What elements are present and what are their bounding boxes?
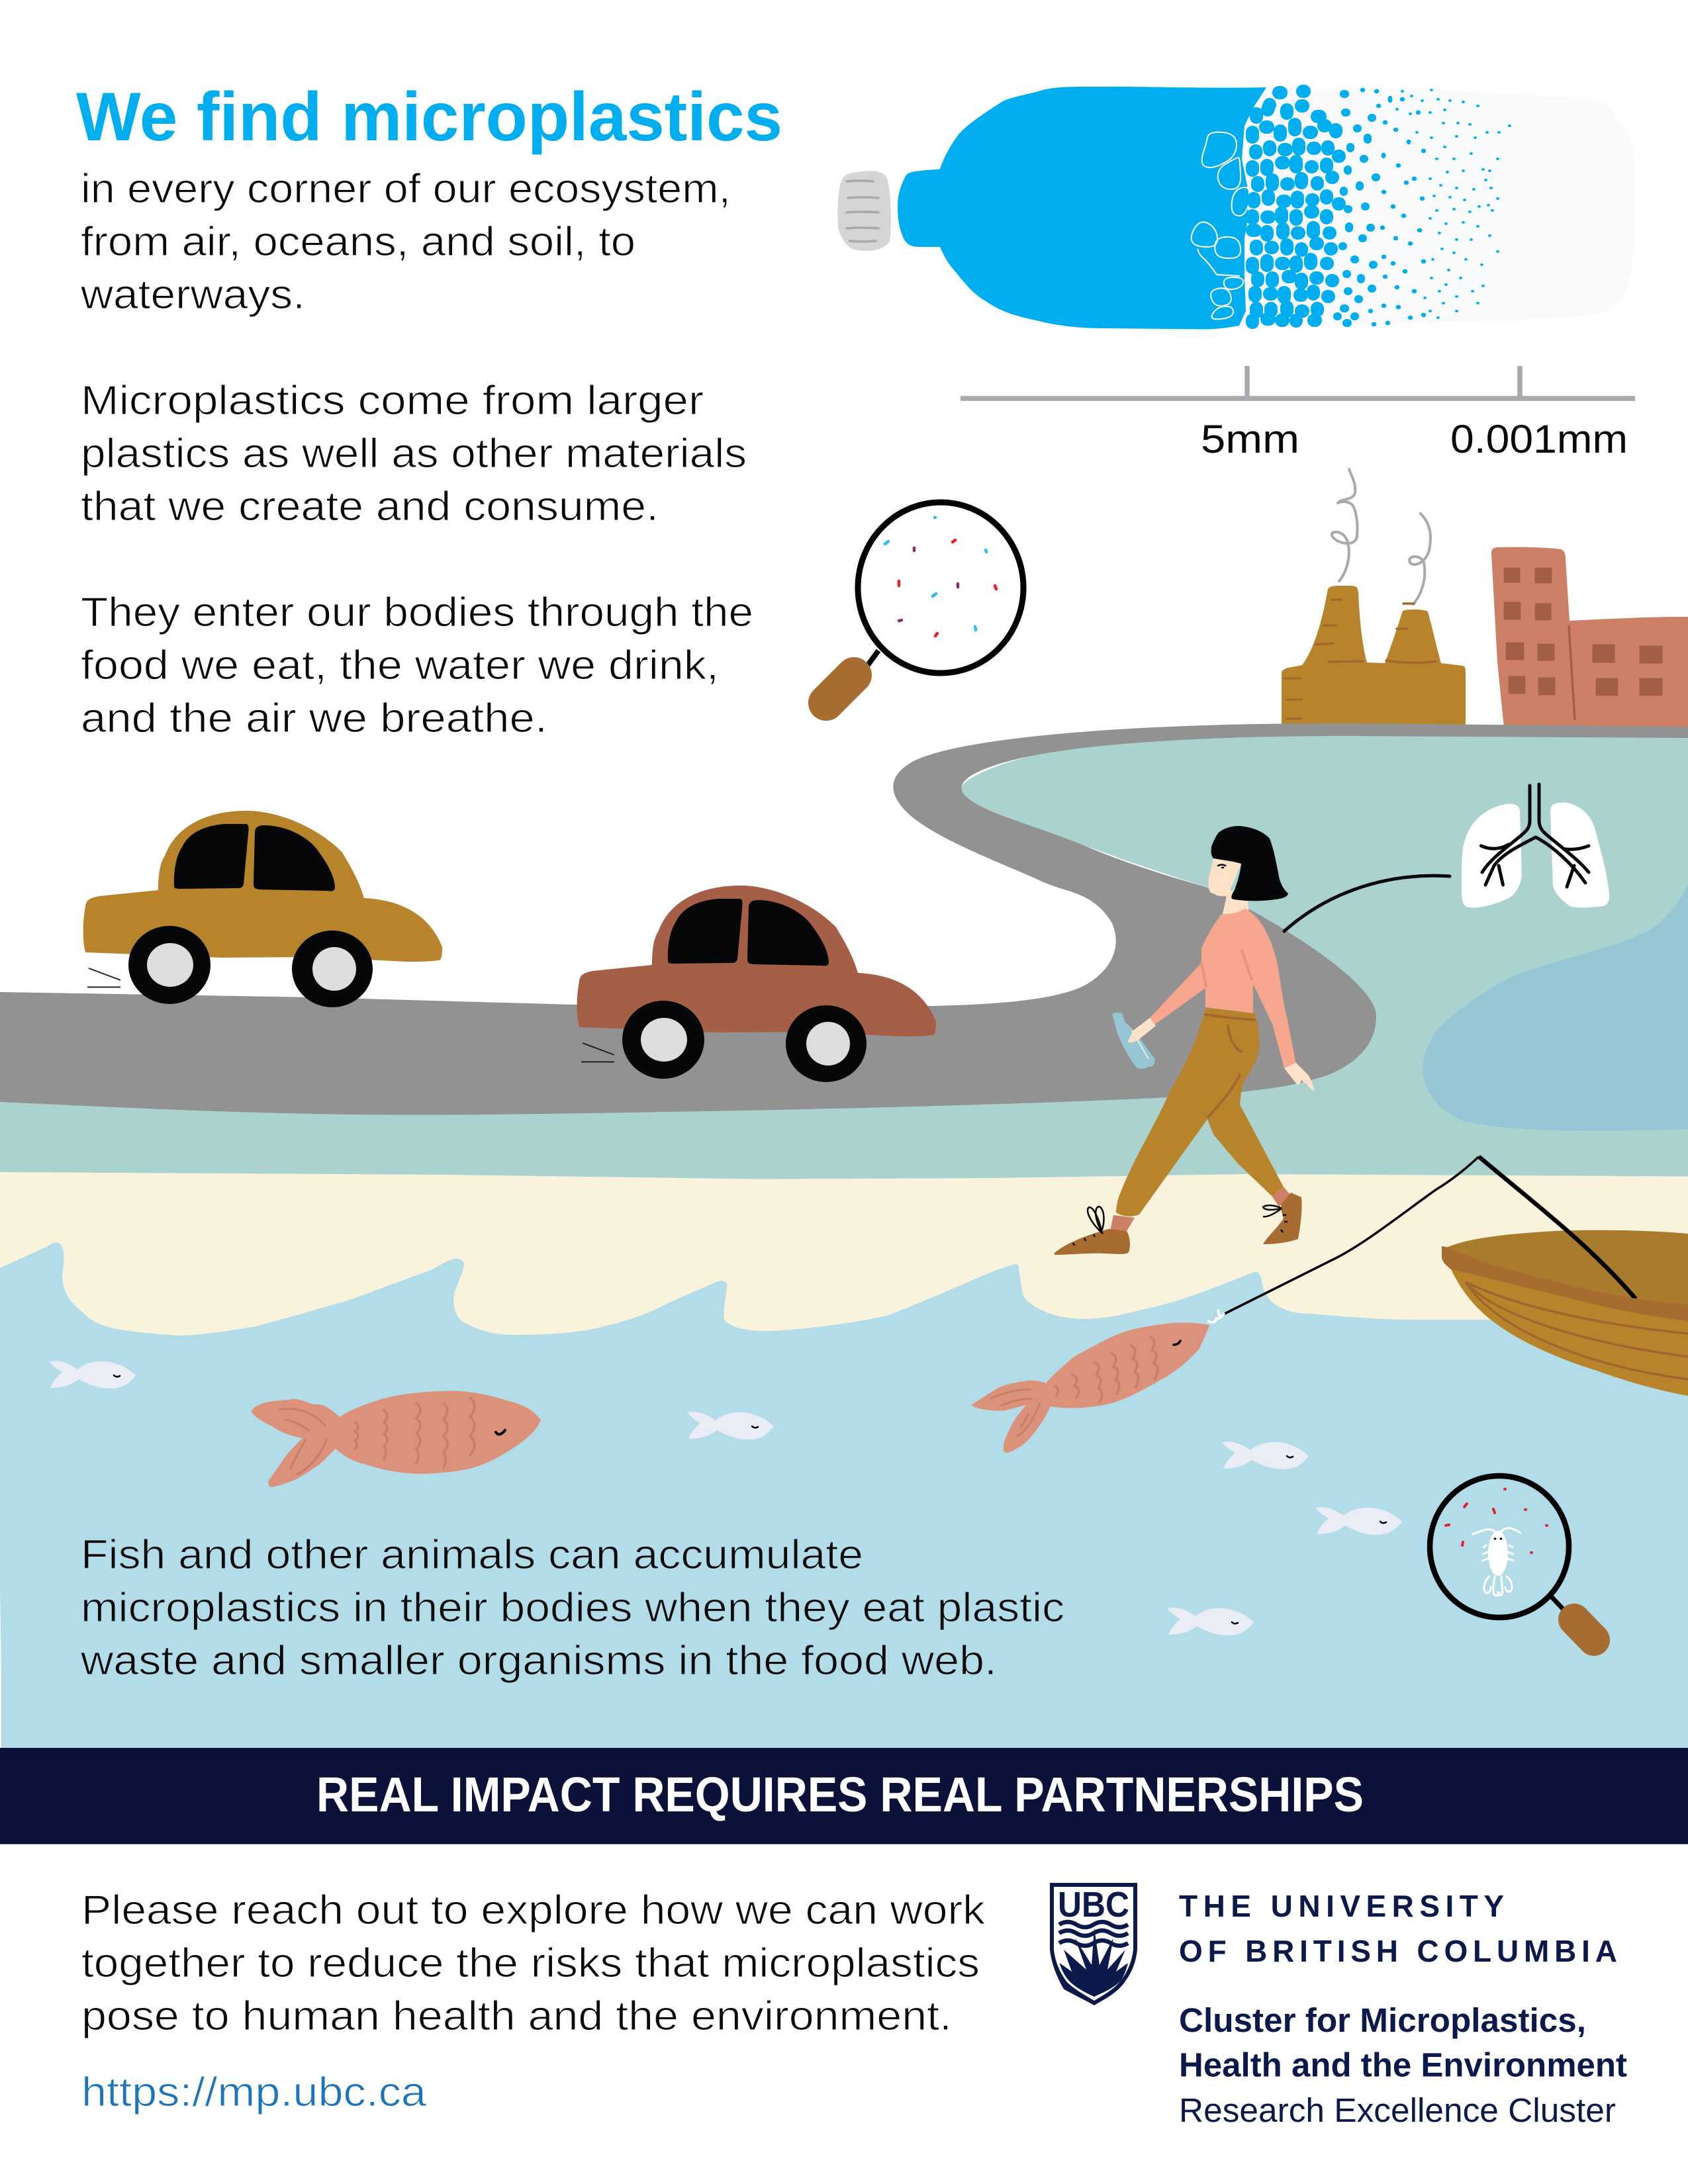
small fish 2 [687,1412,774,1439]
text block: call to action: Please reach out to explore how we can work [81,1888,986,1933]
cluster name [1179,2001,1627,2129]
text block: food web: microplastics in their bodies when they eat plastic [81,1585,1064,1631]
factory with smoke [1282,469,1466,728]
pond [1423,885,1688,1131]
text block: sources: Microplastics come from larger [81,378,704,424]
scales [1055,1337,1158,1402]
text block: exposure: They enter our bodies through the [81,590,753,635]
text block: intro [80,166,731,318]
boat and fishing rod [1223,1157,1688,1396]
solid blue bottle body [898,87,1266,330]
person walking with water bottle [1054,826,1314,1255]
text block: exposure: and the air we breathe. [81,696,547,741]
text block: call to action [81,1888,986,2039]
text block: call to action: together to reduce the risks that microplastics [81,1940,980,1986]
white fracture outlines [1192,132,1250,319]
cluster name: Health and the Environment [1179,2046,1627,2083]
text block: exposure: food we eat, the water we drink, [81,643,719,688]
sweater [1150,909,1296,1068]
small fish 4 [1315,1507,1402,1535]
eye [1174,1341,1180,1345]
scales [355,1398,475,1468]
hull [1451,1269,1688,1396]
pale bottle body [1231,87,1634,327]
cluster name: Research Excellence Cluster [1179,2091,1616,2129]
car windows [668,899,829,966]
boat interior [1446,1230,1688,1307]
hook [1209,1310,1224,1322]
UBC shield logo [1050,1883,1137,2005]
hair [1211,826,1288,901]
car wheels [622,1001,704,1079]
eye [1218,864,1225,868]
small fish 1 [49,1361,136,1388]
fish: large swimming [252,1391,541,1487]
text block: intro: from air, oceans, and soil, to [81,219,635,265]
text block: intro: waterways. [80,272,305,318]
copepod [1473,1528,1520,1596]
banner heading: REAL IMPACT REQUIRES REAL PARTNERSHIPS [316,1767,1364,1822]
fish: caught on hook [972,1310,1224,1453]
fishing line [1223,1157,1479,1314]
pointer line: lungs to person [1284,876,1450,931]
text block: call to action: pose to human health and the environment. [81,1993,952,2039]
text block: intro: in every corner of our ecosystem, [81,166,731,212]
neck [1222,890,1249,917]
magnifying glass with airborne particles [826,502,1023,703]
pants [1116,1008,1284,1216]
large plastic fragments [1252,91,1339,322]
text block: sources: that we create and consume. [81,484,659,529]
hands [1128,1018,1314,1091]
smoke [1332,469,1430,604]
face [1209,858,1241,896]
rim [1442,1246,1688,1321]
lungs icon [1462,784,1609,908]
car wheels [128,926,211,1004]
text block: sources [81,378,747,529]
icon: plastic bottle breaking into fragments [838,87,1634,330]
UBC wordmark [1179,1889,1617,1968]
UBC shield logo: UBC [1058,1885,1129,1925]
magnifying glass with copepod [1430,1476,1594,1640]
banner [0,1748,1688,1844]
teal land [0,731,1688,1185]
tiny plastic particles [1397,90,1510,318]
shoes [1054,1193,1302,1255]
bottle cap [838,171,891,251]
small fish 3 [1222,1441,1309,1469]
road [0,723,1688,1115]
UBC wordmark: THE UNIVERSITY [1179,1889,1504,1923]
car: yellow [83,811,442,1007]
link: https://mp.ubc.ca [81,2070,427,2115]
water with waves [0,1242,1688,1754]
text block: food web: waste and smaller organisms in the food web. [80,1638,997,1684]
small plastic fragments [1362,90,1424,324]
speed lines [87,968,120,987]
UBC wordmark: OF BRITISH COLUMBIA [1179,1934,1617,1968]
cluster name: Cluster for Microplastics, [1179,2001,1586,2039]
text block: sources: plastics as well as other materials [81,431,747,477]
text block: food web [80,1532,1064,1684]
text block: food web: Fish and other animals can accumulate [81,1532,863,1578]
text block: exposure [81,590,753,741]
title: We find microplastics [76,79,782,156]
label: 0.001mm: 0.001mm [1450,417,1628,461]
speed lines [581,1043,614,1062]
ankles [1110,1187,1291,1232]
shoelaces [1088,1205,1282,1234]
hull planks [1466,1282,1688,1379]
fishing rod [1479,1157,1636,1298]
beach sand [0,1172,1688,1423]
medium plastic fragments [1337,94,1376,323]
scale ruler [961,366,1635,461]
small fish 5 [1167,1608,1254,1635]
city buildings [1491,547,1688,735]
car: brown [577,886,936,1082]
eye [496,1430,505,1434]
water bottle [1112,1013,1155,1069]
label: 5mm: 5mm [1201,417,1299,461]
car windows [174,824,335,891]
